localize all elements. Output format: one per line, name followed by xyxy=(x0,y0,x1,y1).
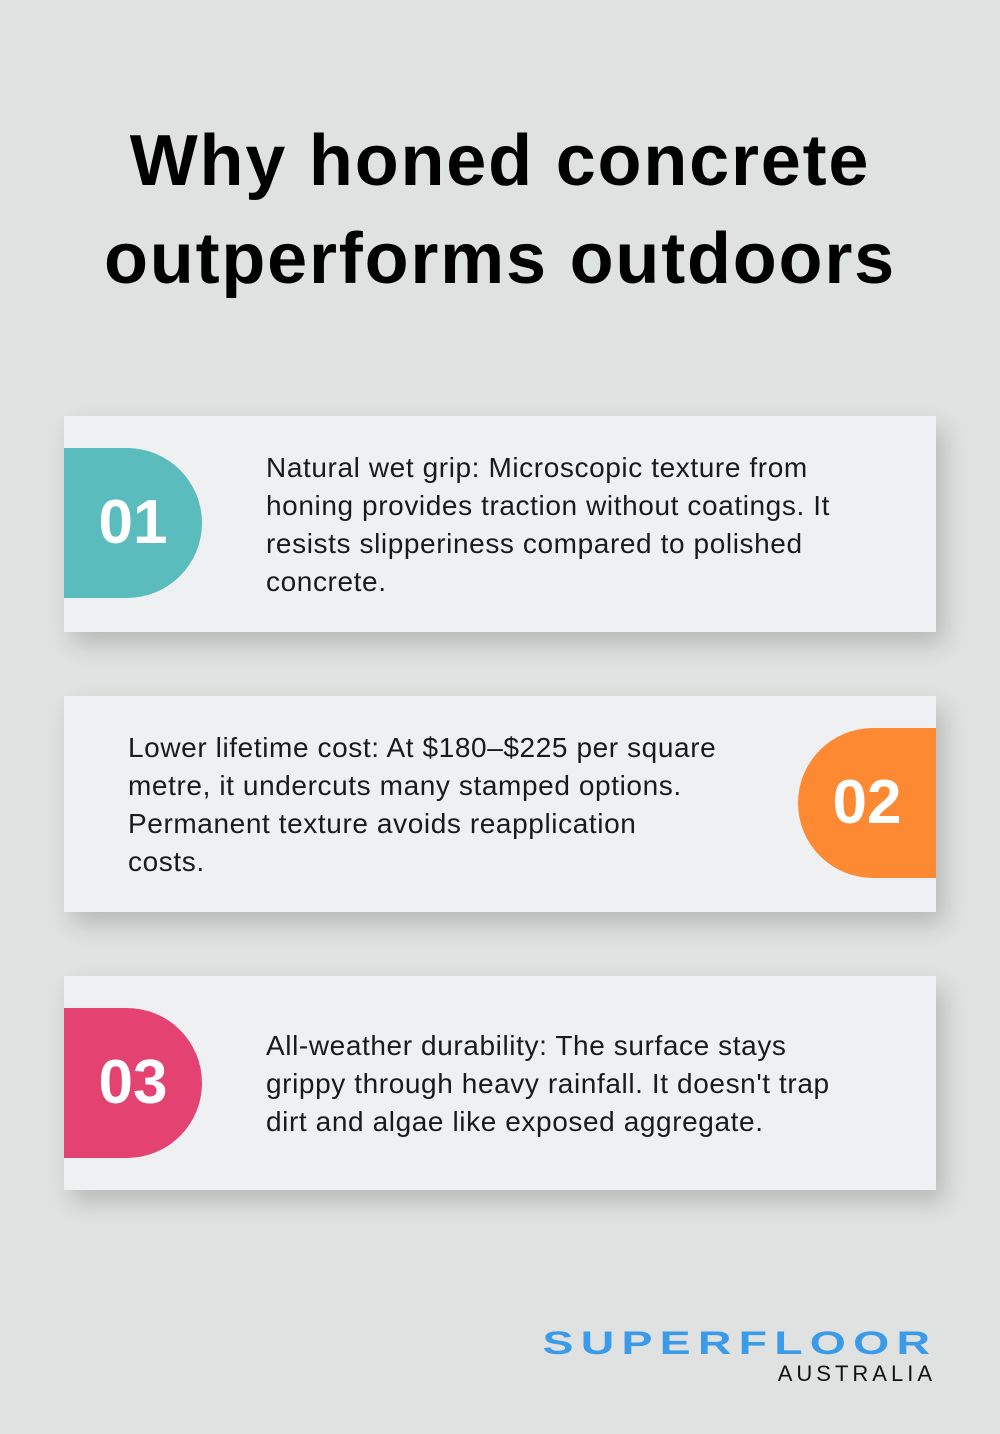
logo: SUPERFLOOR xyxy=(542,1325,937,1361)
text 2: costs. xyxy=(128,846,205,877)
title: Why honed concrete xyxy=(130,121,870,201)
text 3: dirt and algae like exposed aggregate. xyxy=(266,1106,764,1137)
text 2 xyxy=(128,732,716,877)
text 3: All-weather durability: The surface stays xyxy=(266,1030,787,1061)
logo xyxy=(542,1325,937,1386)
card 1 xyxy=(64,416,936,632)
text 1 xyxy=(266,452,830,597)
badge 01: 01 xyxy=(99,488,167,557)
card 3 xyxy=(64,976,936,1190)
text 2: Permanent texture avoids reapplication xyxy=(128,808,636,839)
badge 02 xyxy=(798,728,936,878)
text 3: grippy through heavy rainfall. It doesn't trap xyxy=(266,1068,830,1099)
text 1: concrete. xyxy=(266,566,387,597)
badge 02: 02 xyxy=(833,768,901,837)
text 3 xyxy=(266,1030,830,1137)
text 1: resists slipperiness compared to polished xyxy=(266,528,803,559)
text 2: Lower lifetime cost: At $180–$225 per square xyxy=(128,732,716,763)
title xyxy=(104,121,896,299)
card 2 xyxy=(64,696,936,912)
logo: AUSTRALIA xyxy=(778,1361,936,1386)
text 1: Natural wet grip: Microscopic texture from xyxy=(266,452,808,483)
text 1: honing provides traction without coatings. It xyxy=(266,490,830,521)
title: outperforms outdoors xyxy=(104,219,896,299)
badge 01 xyxy=(64,448,202,598)
text 2: metre, it undercuts many stamped options. xyxy=(128,770,682,801)
badge 03: 03 xyxy=(99,1048,167,1117)
badge 03 xyxy=(64,1008,202,1158)
